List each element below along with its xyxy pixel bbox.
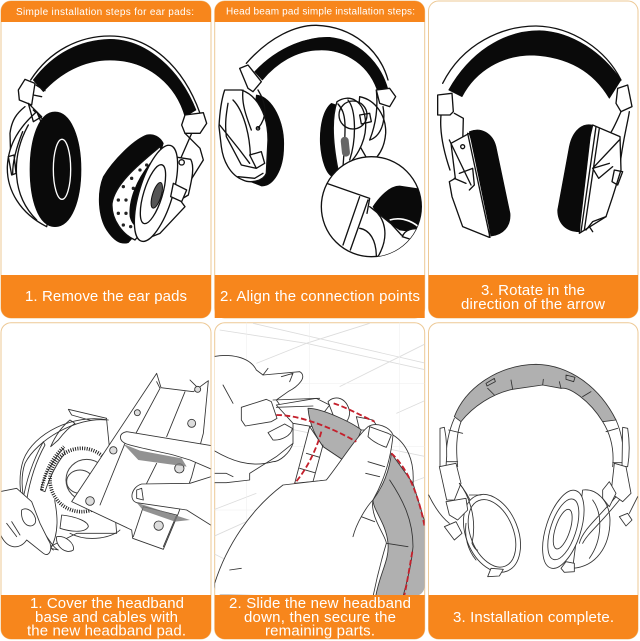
header: head beam pad steps	[215, 1, 425, 22]
header: head beam pad steps: Head beam pad simple installation steps:	[226, 6, 415, 18]
footer: step 1 cover headband base	[1, 595, 211, 640]
panel: cover the headband base	[0, 323, 213, 640]
panel: installation complete	[428, 323, 638, 639]
footer: step 2 slide headband: 2. Slide the new headband	[229, 595, 411, 612]
panel: remove the ear pads	[1, 1, 211, 318]
footer: step 1 cover headband base: the new headband pad.	[27, 622, 186, 640]
footer: step 2 slide headband: down, then secure the	[244, 609, 396, 626]
footer: step 1 remove ear pads: 1. Remove the ear pads	[25, 288, 187, 305]
footer: step 3 rotate	[428, 275, 638, 318]
illustration: headphones with magnified connection point	[219, 25, 426, 257]
footer: step 2 slide headband	[215, 595, 425, 640]
footer: step 3 installation complete	[428, 595, 638, 639]
footer: step 1 cover headband base: 1. Cover the headband	[30, 595, 184, 612]
panel: align the connection points	[215, 1, 426, 318]
header: ear pads steps: Simple installation steps for ear pads:	[16, 7, 194, 18]
illustration: headphones with ear pad removed	[7, 36, 207, 246]
footer: step 3 installation complete: 3. Installation complete.	[453, 609, 614, 626]
footer: step 2 align connection points	[215, 275, 425, 318]
footer: step 2 slide headband: remaining parts.	[265, 622, 375, 640]
illustration: hands fitting headband pad over base	[0, 373, 213, 555]
footer: step 2 align connection points: 2. Align the connection points	[220, 288, 420, 305]
panel: rotate in the direction of the arrow	[428, 1, 638, 318]
illustration: hands sliding grey headband pad with red dashed lines	[213, 320, 426, 597]
footer: step 3 rotate: direction of the arrow	[461, 296, 605, 313]
footer: step 1 remove ear pads	[1, 275, 211, 318]
panel: slide the new headband down	[213, 320, 426, 640]
illustration: headphones front view	[438, 26, 632, 237]
header: ear pads steps	[1, 1, 211, 22]
illustration: headphones with new grey headband pad	[429, 364, 638, 581]
footer: step 1 cover headband base: base and cables with	[35, 609, 178, 626]
footer: step 3 rotate: 3. Rotate in the	[481, 282, 585, 299]
